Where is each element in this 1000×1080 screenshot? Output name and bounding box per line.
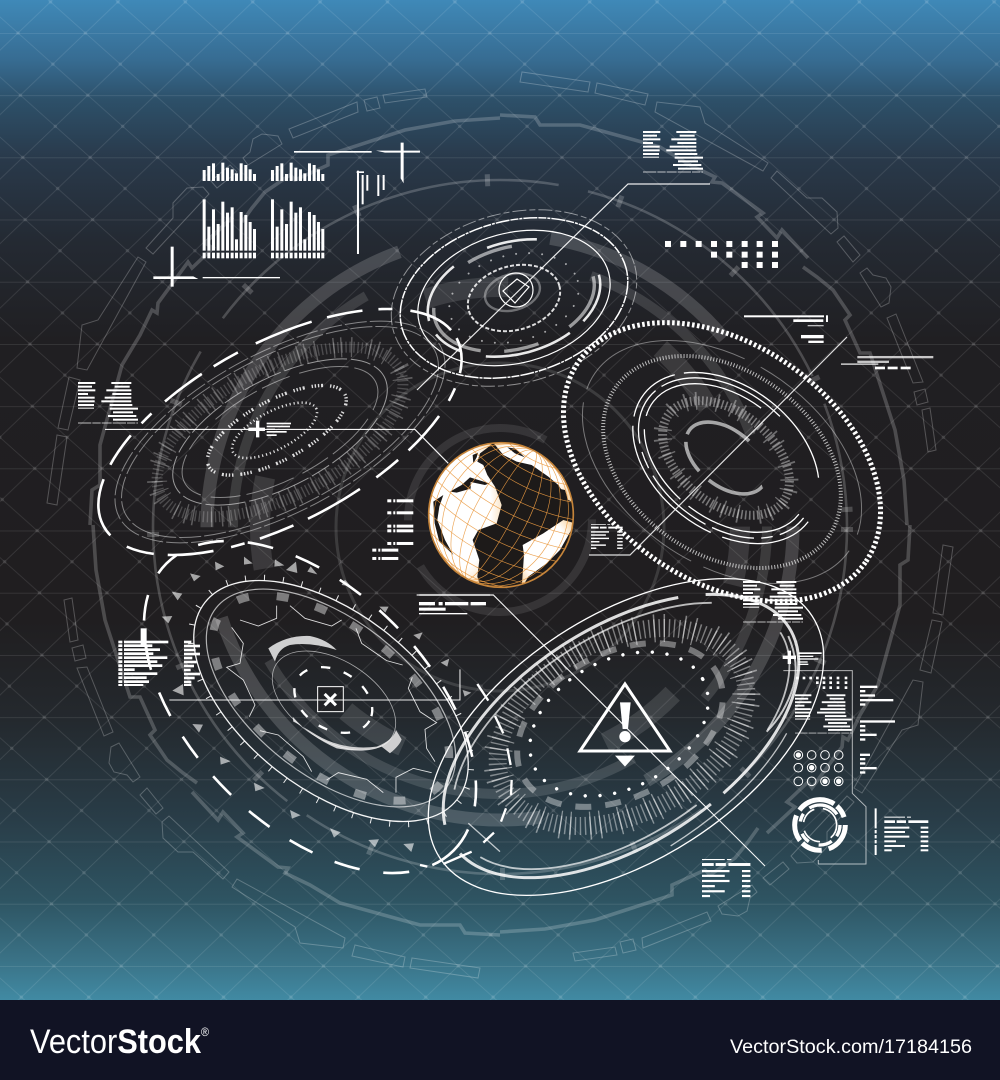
data block top right bbox=[643, 131, 703, 172]
panel dot grid bbox=[796, 677, 847, 689]
footer logo: VectorStock bbox=[30, 1023, 210, 1061]
concentric gray rings bbox=[47, 72, 953, 978]
data block bottom left bbox=[118, 628, 200, 686]
dark coast details bbox=[433, 447, 570, 555]
panel data block lower bbox=[884, 817, 928, 851]
right gauge leader line bbox=[589, 337, 847, 555]
ellipse: right gauge bbox=[511, 265, 933, 659]
panel ring icon bbox=[795, 800, 845, 850]
data block beside right gauge bbox=[591, 524, 623, 549]
bottom left gauge interior bbox=[169, 606, 460, 793]
top gauge centre circle and diamond bbox=[499, 273, 533, 307]
panel data block bbox=[795, 694, 852, 733]
data block upper right of warning gauge bbox=[743, 581, 803, 622]
continents bbox=[430, 444, 572, 584]
warning triangle bbox=[580, 684, 670, 767]
panel side bars bbox=[860, 686, 895, 855]
data block lower warning gauge bbox=[702, 859, 750, 897]
zigzag lines bbox=[227, 606, 437, 793]
ellipse: bottom left gauge bbox=[83, 480, 537, 934]
panel crosshair bbox=[783, 651, 822, 665]
crescents bbox=[268, 636, 337, 662]
top gauge leader line bbox=[417, 184, 710, 390]
x marker bbox=[318, 687, 343, 712]
dot matrix top right bbox=[665, 241, 778, 268]
bottom left triangles bbox=[162, 557, 471, 852]
panel circle matrix bbox=[794, 751, 843, 786]
panel frame bbox=[783, 671, 866, 864]
warning leader line bbox=[419, 595, 765, 866]
label rows beside globe bbox=[372, 499, 413, 560]
right instrument panel bbox=[783, 651, 928, 864]
ellipse: left gauge bbox=[61, 259, 499, 605]
chart crosshair corner marks bbox=[153, 143, 420, 287]
ellipse: bottom right gauge bbox=[373, 514, 879, 960]
bottom left outer dashes bbox=[83, 480, 537, 934]
globe bbox=[428, 442, 574, 588]
footer bar bbox=[0, 1000, 1000, 1080]
footer logo: ® bbox=[201, 1025, 209, 1039]
data block left bbox=[78, 382, 138, 423]
bottom right dashes bbox=[420, 636, 796, 867]
top bar charts bbox=[153, 143, 420, 287]
latitude longitude grid bbox=[430, 444, 572, 586]
leader line bbox=[169, 669, 460, 700]
ellipse: top gauge bbox=[371, 184, 657, 412]
footer url: VectorStock.com/17184156 bbox=[730, 1037, 972, 1058]
left gauge crosshair and leader bbox=[105, 421, 448, 463]
label bars below globe bbox=[417, 594, 490, 614]
label bars right bbox=[744, 315, 933, 369]
